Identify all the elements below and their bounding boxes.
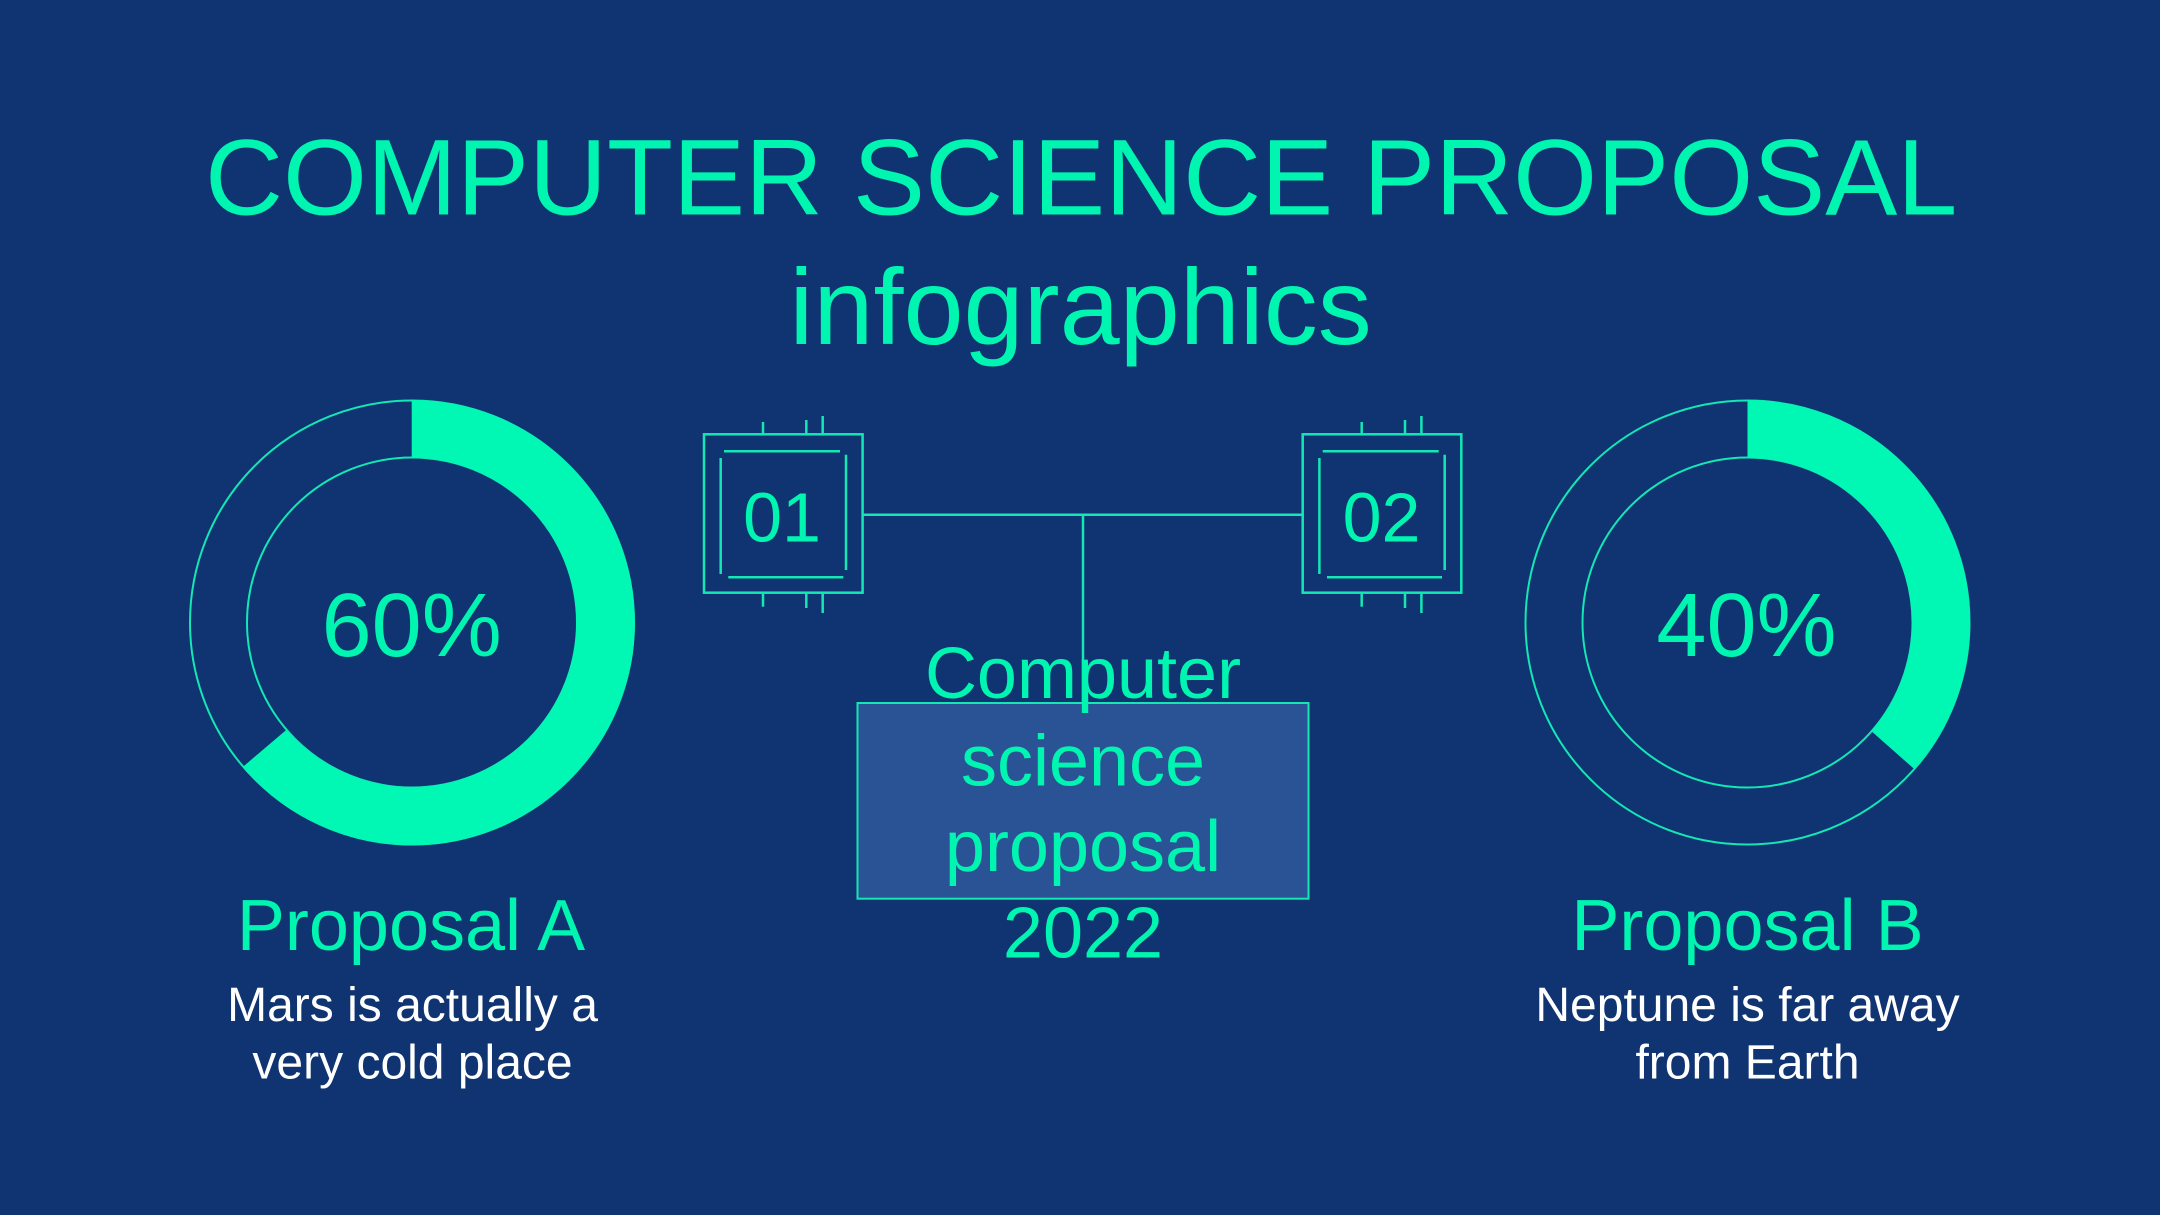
title bbox=[205, 116, 1957, 367]
description A: Mars is actually a bbox=[227, 979, 598, 1032]
central text: Computer bbox=[925, 634, 1241, 714]
description A: very cold place bbox=[252, 1036, 573, 1090]
heading B: Proposal B bbox=[1571, 886, 1924, 966]
chip 02 number: 02 bbox=[1343, 479, 1420, 557]
central text: proposal bbox=[945, 807, 1221, 887]
text block: proposal B bbox=[1535, 886, 1960, 1090]
icon: chip 02 bbox=[1303, 416, 1461, 613]
description B bbox=[1535, 979, 1960, 1090]
filled arc B 40% bbox=[1748, 400, 1970, 770]
panel: proposal B donut chart bbox=[1526, 400, 1970, 844]
central text: science bbox=[961, 721, 1205, 801]
connector lines between chips and central box bbox=[862, 515, 1303, 704]
description B: Neptune is far away bbox=[1535, 979, 1960, 1032]
value A: 60% bbox=[322, 576, 502, 676]
description A bbox=[227, 979, 598, 1090]
outline rings B bbox=[1526, 400, 1970, 844]
title: infographics bbox=[789, 246, 1372, 367]
text block: proposal A bbox=[227, 886, 598, 1090]
chip 01 number: 01 bbox=[743, 479, 821, 557]
title: COMPUTER SCIENCE PROPOSAL bbox=[205, 116, 1957, 238]
central text: 2022 bbox=[1003, 894, 1163, 974]
chip 02 pins bbox=[1362, 416, 1421, 613]
chip 01 body bbox=[704, 434, 863, 593]
heading A: Proposal A bbox=[237, 886, 585, 966]
outline rings A bbox=[190, 400, 634, 844]
description B: from Earth bbox=[1635, 1036, 1860, 1090]
chip 02 body bbox=[1303, 434, 1461, 593]
panel: proposal A donut chart bbox=[190, 400, 635, 845]
chip 02 inner lines bbox=[1319, 451, 1445, 577]
central text bbox=[925, 634, 1241, 974]
icon: chip 01 bbox=[704, 416, 863, 613]
central box bbox=[858, 703, 1308, 899]
chip 01 inner lines bbox=[721, 451, 846, 577]
value B: 40% bbox=[1656, 576, 1837, 676]
filled arc A 60% bbox=[243, 400, 635, 845]
chip 01 pins bbox=[763, 416, 823, 613]
